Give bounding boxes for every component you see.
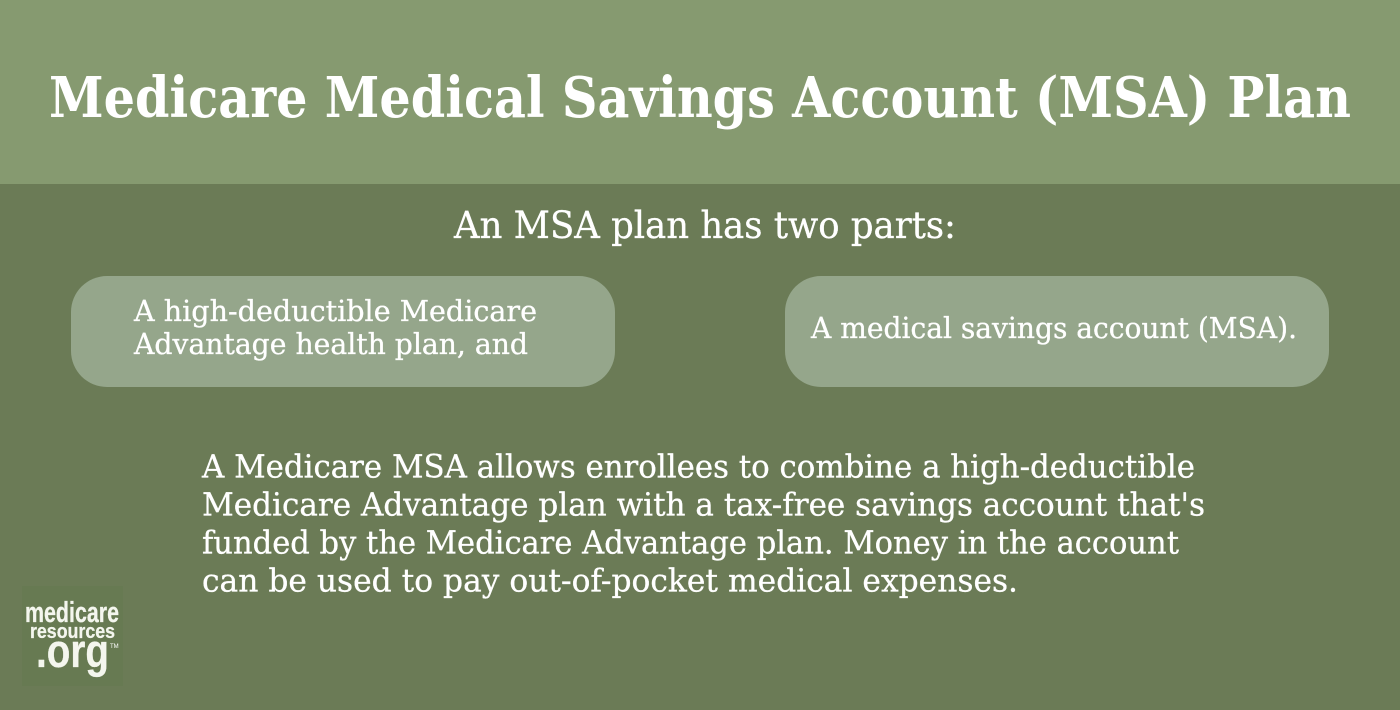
logo: medicareresources.org: resources [30, 621, 115, 643]
body text: A Medicare MSA allows enrollees to combine a high-deductible [201, 448, 1195, 486]
logo: medicareresources.org: .org [36, 624, 109, 677]
panel: high-deductible plan: A high-deductible Medicare [133, 294, 537, 328]
panel: medical savings account [785, 276, 1329, 387]
body text [201, 448, 1205, 600]
panel: high-deductible plan: Advantage health plan, and [133, 327, 528, 361]
body text: can be used to pay out-of-pocket medical expenses. [202, 562, 1018, 600]
logo: medicareresources.org: TM [110, 644, 119, 650]
panel: high-deductible plan [71, 276, 615, 387]
subheading: An MSA plan has two parts: [453, 204, 956, 247]
body text: funded by the Medicare Advantage plan. Money in the account [202, 524, 1179, 562]
logo: medicareresources.org: medicare [25, 597, 119, 629]
logo: medicareresources.org [22, 586, 123, 686]
panel: medical savings account: A medical savings account (MSA). [810, 311, 1297, 345]
header band [0, 0, 1400, 184]
body text: Medicare Advantage plan with a tax-free savings account that's [202, 486, 1205, 524]
